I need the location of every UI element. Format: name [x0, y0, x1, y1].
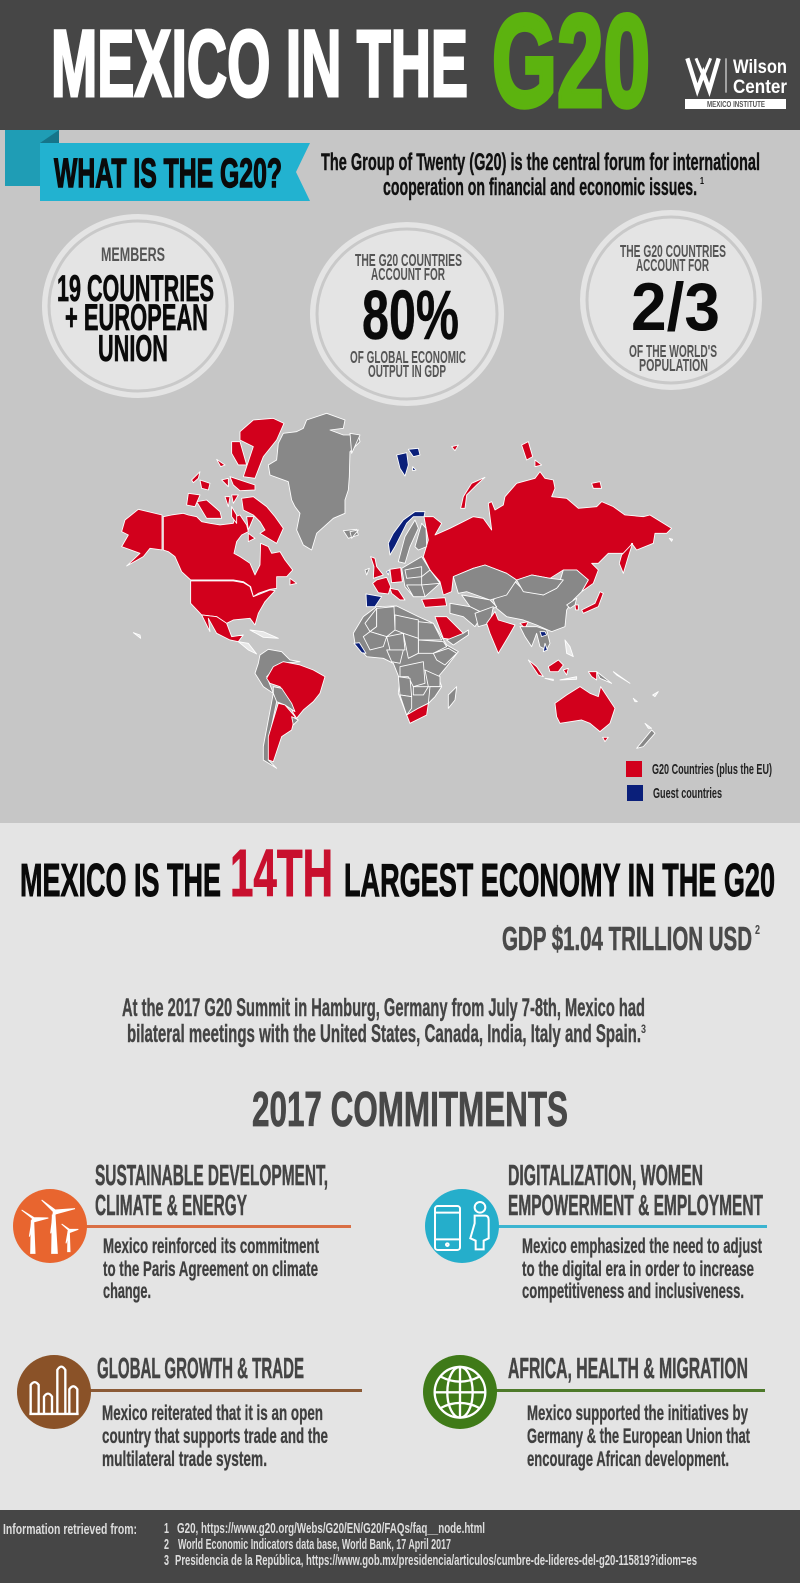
map: world with G20 countries highlighted [122, 413, 673, 768]
circle: members: + EUROPEAN [65, 297, 208, 338]
heading: Mexico is the 14th largest economy: 14TH [230, 836, 333, 911]
commitment: global growth and trade: multilateral trade system. [102, 1448, 267, 1471]
commitment: Africa, health and migration [423, 1353, 765, 1471]
commitment: global growth and trade [17, 1353, 362, 1471]
circle: 80 percent of output: ACCOUNT FOR [371, 264, 445, 284]
legend [626, 761, 772, 802]
panel: footer sources: 2 [164, 1536, 169, 1553]
panel: footer sources: 1 [164, 1520, 169, 1537]
text: G20 definition: 1 [700, 176, 704, 187]
circle: 80 percent of output: 80% [362, 276, 459, 354]
panel: footer sources: 3 [164, 1552, 169, 1569]
icon: phone and woman [425, 1189, 499, 1263]
commitment: digitalization [425, 1160, 767, 1303]
circle: two thirds of population: ACCOUNT FOR [636, 255, 709, 275]
commitment: sustainable development: change. [103, 1280, 151, 1303]
circle: 80 percent of output: THE G20 COUNTRIES [355, 250, 462, 270]
circle: 80 percent of output: OUTPUT IN GDP [368, 361, 446, 381]
map: Americas [122, 413, 360, 768]
legend: Guest countries [653, 785, 722, 802]
text: Hamburg summit: 3 [641, 1022, 646, 1036]
title: Mexico in the: MEXICO IN THE [51, 11, 468, 117]
circle: two thirds of population: 2/3 [631, 269, 720, 345]
commitment: sustainable development: Mexico reinforced its commitment [103, 1235, 319, 1258]
circle: members [42, 214, 234, 398]
circle: 80 percent of output [310, 222, 504, 406]
icon: bar chart [17, 1355, 91, 1429]
circle: two thirds of population: THE G20 COUNTRIES [620, 241, 726, 261]
panel: footer sources: World Economic Indicators data base, World Bank, 17 April 2017 [178, 1536, 451, 1553]
panel: header [0, 0, 800, 134]
commitment: sustainable development: SUSTAINABLE DEVELOPMENT, [95, 1160, 328, 1192]
circle: two thirds of population: POPULATION [639, 355, 708, 375]
commitment: global growth and trade: Mexico reiterated that it is an open [102, 1402, 323, 1425]
circle: 80 percent of output: OF GLOBAL ECONOMIC [350, 347, 466, 367]
circle: members: 19 COUNTRIES [57, 268, 214, 309]
panel: what is the G20 and map [0, 130, 800, 823]
logo: Wilson Center: Center [733, 77, 788, 98]
stat: GDP: 2 [755, 922, 760, 937]
circle: members: MEMBERS [101, 245, 165, 266]
logo: Wilson Center: Wilson [733, 57, 787, 78]
commitment: sustainable development: CLIMATE & ENERGY [95, 1190, 247, 1222]
commitment: global growth and trade: country that supports trade and the [102, 1425, 328, 1448]
logo: Wilson Center [685, 57, 788, 109]
circle: members: UNION [98, 328, 168, 369]
circle: two thirds of population [580, 210, 762, 390]
panel: footer sources: G20, https://www.g20.org/Webs/G20/EN/G20/FAQs/faq__node.html [177, 1520, 485, 1537]
heading: Mexico is the 14th largest economy [20, 836, 775, 911]
map: Africa [353, 606, 458, 723]
heading: Mexico is the 14th largest economy: MEXICO IS THE [20, 854, 221, 906]
heading: 2017 commitments: 2017 COMMITMENTS [252, 1083, 568, 1137]
text: G20 definition [321, 149, 760, 201]
text: Hamburg summit [122, 994, 646, 1048]
panel: footer sources: Information retrieved from: [3, 1521, 137, 1538]
logo: Wilson Center: MEXICO INSTITUTE [707, 100, 766, 109]
icon: globe [423, 1355, 497, 1429]
commitment: global growth and trade: GLOBAL GROWTH & TRADE [97, 1353, 304, 1385]
commitment: sustainable development: to the Paris Agreement on climate [103, 1258, 318, 1281]
map: Europe, Africa, Asia and Oceania [350, 433, 673, 748]
ribbon: what is the G20 [5, 130, 310, 201]
panel: footer sources [0, 1510, 800, 1583]
icon: wind turbines [13, 1189, 87, 1263]
commitment: sustainable development [13, 1160, 351, 1303]
circle: two thirds of population: OF THE WORLD'S [629, 341, 717, 361]
ribbon: what is the G20: WHAT IS THE G20? [54, 150, 282, 196]
